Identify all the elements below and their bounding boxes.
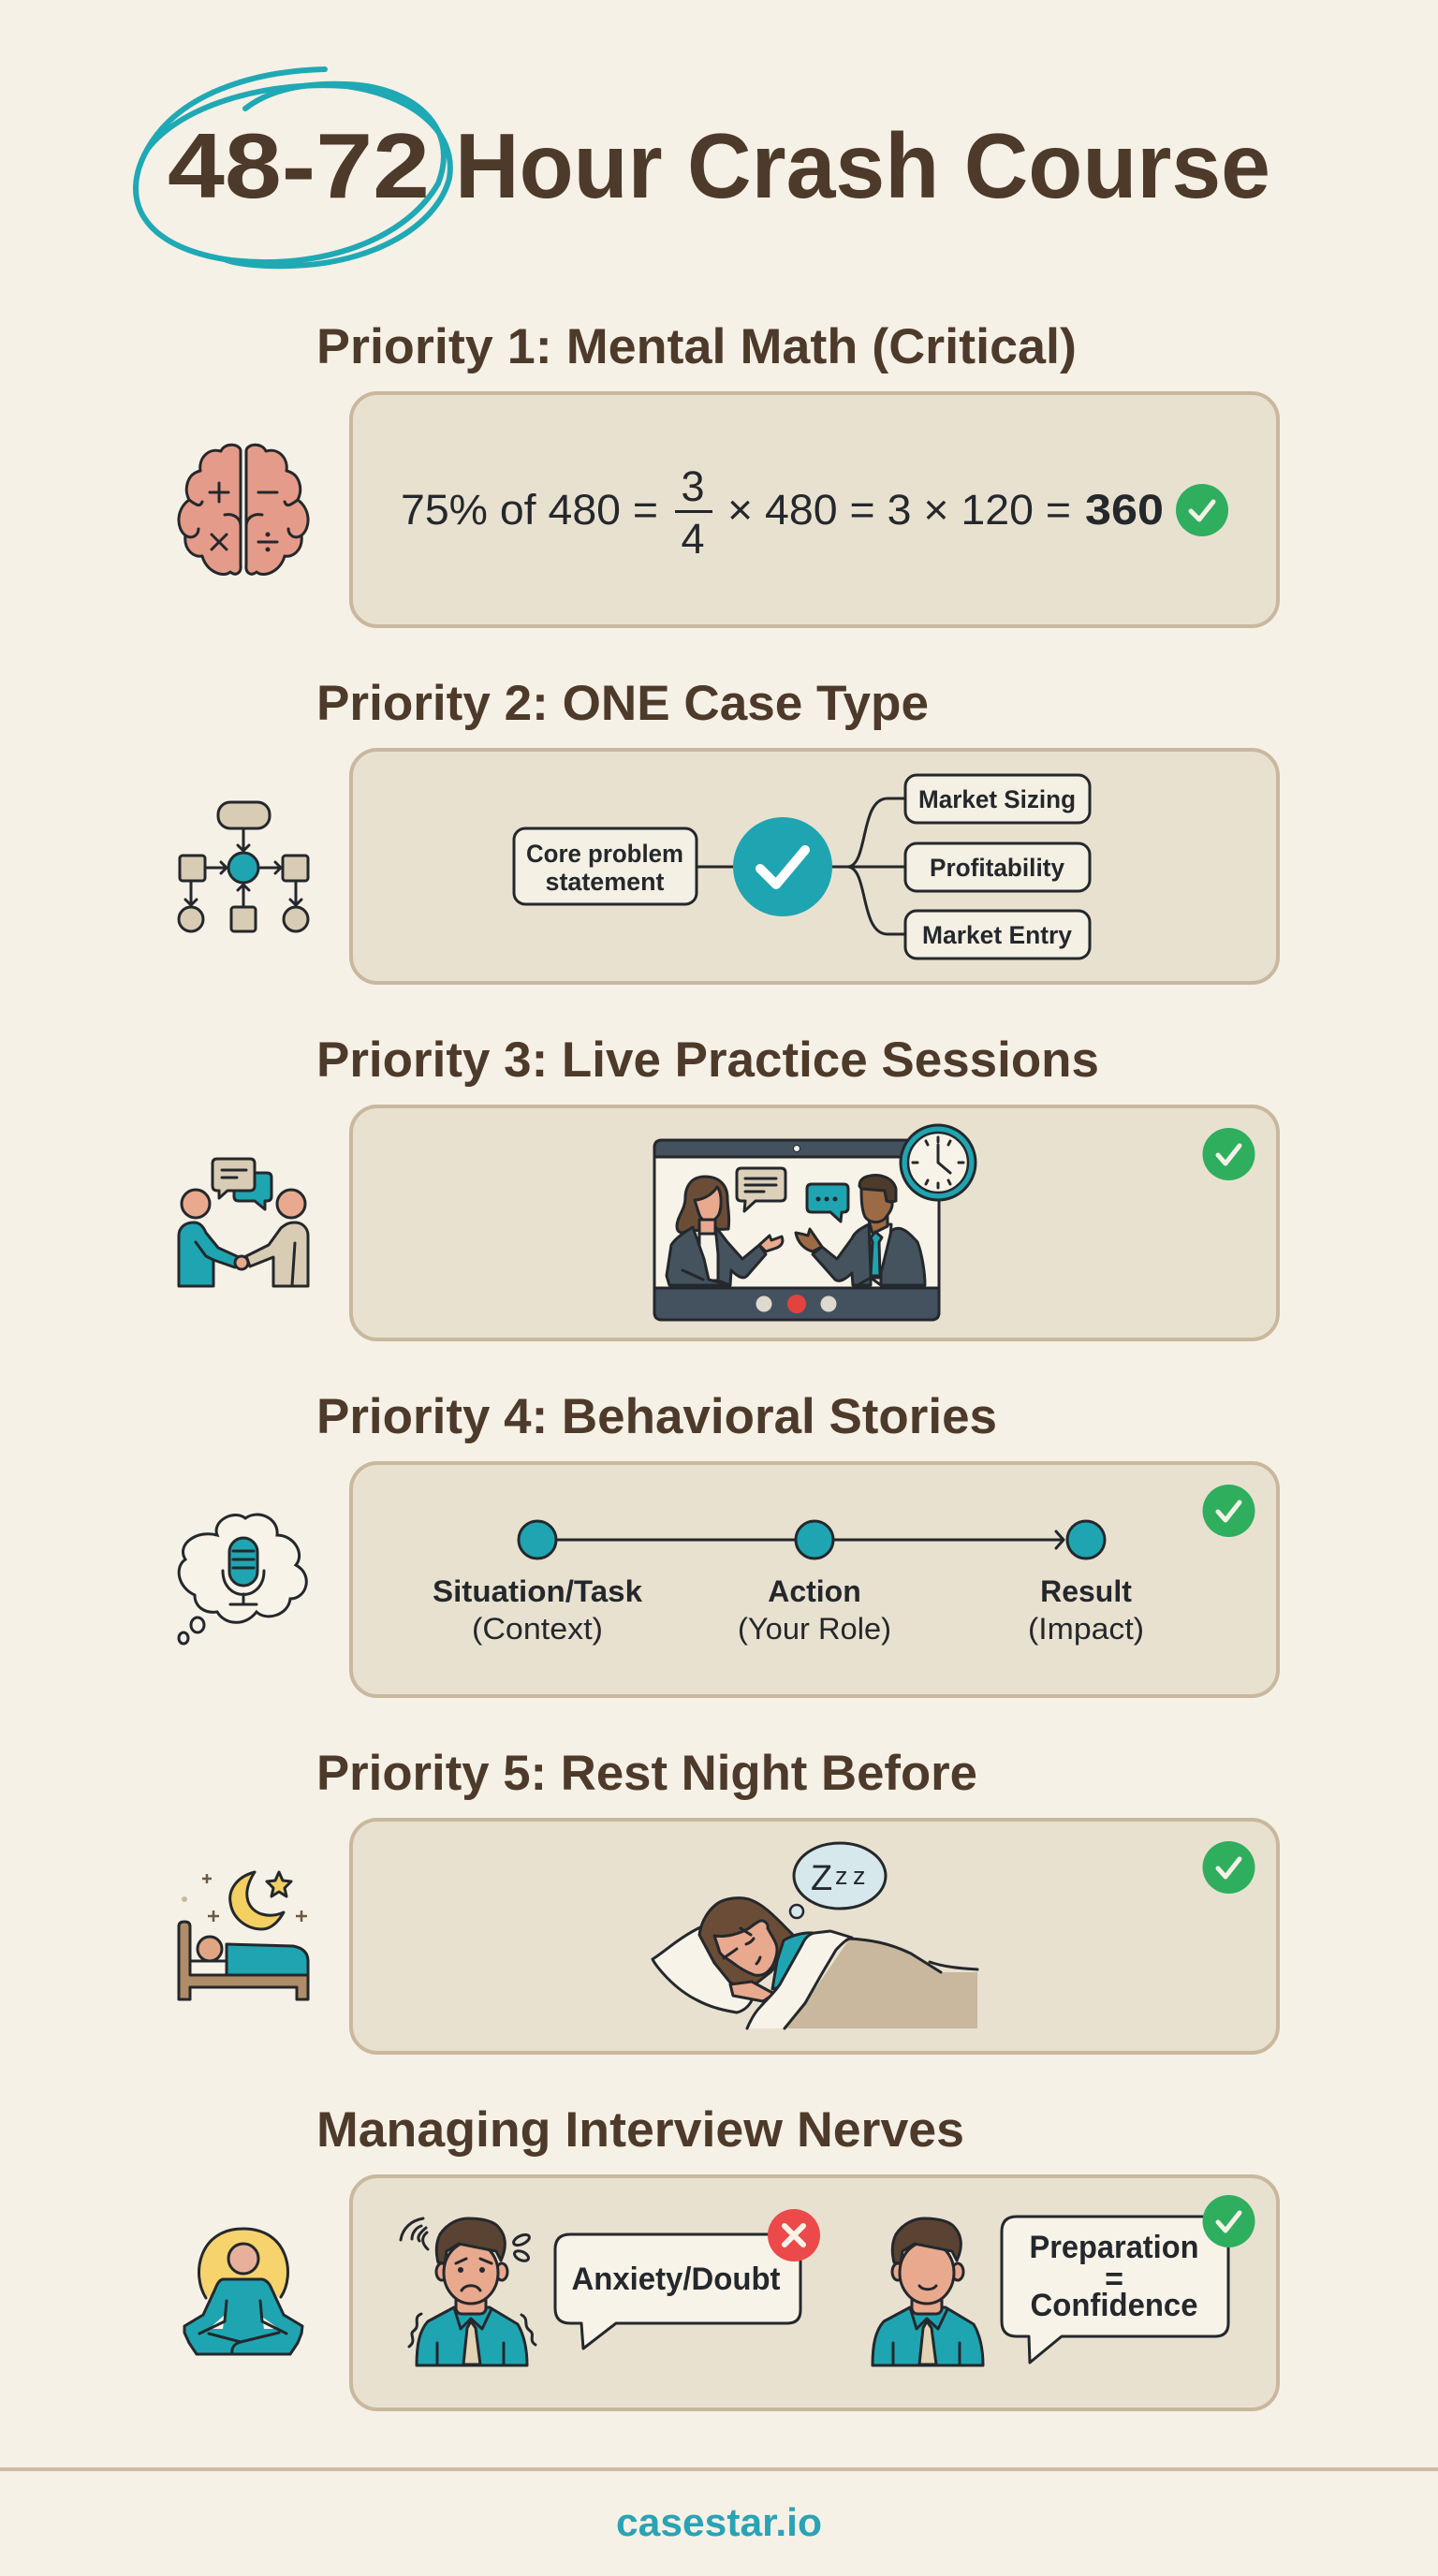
option: market sizing [905, 775, 1090, 823]
title remainder: Hour Crash Course [455, 114, 1270, 217]
man [796, 1176, 925, 1285]
footer [0, 2467, 1438, 2544]
top bar [654, 1140, 939, 1157]
option: profitability [905, 843, 1090, 891]
control bar [654, 1288, 939, 1320]
equation result: 360 [1085, 486, 1164, 534]
confident person [873, 2218, 983, 2365]
equation steps: × 480 = 3 × 120 = [727, 486, 1071, 534]
step: action: Action [768, 1574, 861, 1608]
step: result [1028, 1574, 1144, 1646]
icon: bed with moon [179, 1872, 308, 1999]
core problem box: statement [545, 868, 665, 896]
check badge [1202, 1841, 1255, 1894]
thought bubble Zzz: Z [811, 1859, 832, 1898]
card [351, 750, 1278, 983]
section: priority 2 one case type [179, 676, 1278, 983]
speech bubble: anxiety [555, 2234, 800, 2349]
step: situation: (Context) [472, 1612, 603, 1646]
card [351, 2176, 1278, 2409]
teal shirt [772, 1933, 813, 1989]
section: priority 4 behavioral stories [179, 1389, 1278, 1696]
heading: Priority 2: ONE Case Type [316, 676, 929, 731]
step: result: (Impact) [1028, 1612, 1144, 1646]
core problem box: Core problem [526, 840, 683, 868]
section: priority 1 mental math [179, 319, 1278, 626]
card [351, 1820, 1278, 2053]
heading: Priority 3: Live Practice Sessions [316, 1032, 1099, 1088]
anxious person [401, 2218, 536, 2365]
fraction three quarters [675, 462, 712, 563]
card [351, 393, 1278, 626]
hand [730, 1982, 774, 2001]
check badge [1202, 1485, 1255, 1537]
fraction three quarters: 3 [681, 462, 705, 510]
face [714, 1921, 777, 1975]
thought bubble Zzz: z [853, 1862, 865, 1890]
timeline node 3 [1067, 1521, 1105, 1559]
title [136, 69, 1270, 266]
teal check circle [733, 817, 832, 916]
step: action: (Your Role) [738, 1612, 891, 1646]
hand-drawn teal ring [136, 69, 450, 266]
speech bubble: preparation equals confidence: = [1105, 2261, 1123, 2297]
icon: brain [179, 445, 308, 575]
hair [699, 1898, 793, 1989]
section: managing interview nerves [184, 2102, 1278, 2409]
check badge [1176, 484, 1228, 536]
step: situation: Situation/Task [433, 1574, 642, 1608]
connector lines [697, 798, 905, 934]
beige speech bubble [737, 1168, 785, 1211]
head [456, 2291, 486, 2314]
option: profitability: Profitability [930, 854, 1064, 882]
white blanket fold [747, 1931, 852, 2028]
wall clock [901, 1125, 976, 1200]
step: action [738, 1574, 891, 1646]
timeline [519, 1521, 1105, 1559]
icon: meditating person [184, 2229, 302, 2354]
heading: Priority 5: Rest Night Before [316, 1746, 977, 1801]
body [417, 2307, 527, 2365]
check badge [1202, 1128, 1255, 1180]
step: situation [433, 1574, 642, 1646]
timeline node 1 [519, 1521, 556, 1559]
option: market entry [905, 911, 1090, 959]
title highlighted range: 48-72 [168, 114, 430, 217]
video call window [654, 1125, 976, 1320]
timeline node 2 [796, 1521, 833, 1559]
equation [401, 462, 1228, 563]
section: priority 5 rest [179, 1746, 1278, 2053]
head [912, 2291, 942, 2314]
heading: Priority 4: Behavioral Stories [316, 1389, 997, 1444]
body [873, 2307, 983, 2365]
speech bubble: preparation equals confidence: Confidence [1030, 2288, 1198, 2323]
icon: handshake with speech bubbles [179, 1159, 308, 1286]
speech bubble: anxiety: Anxiety/Doubt [571, 2261, 781, 2297]
step: result: Result [1040, 1574, 1132, 1608]
woman [667, 1177, 783, 1285]
heading: Priority 1: Mental Math (Critical) [316, 319, 1077, 374]
stress marks [401, 2218, 536, 2347]
pillow [653, 1926, 752, 2012]
blanket [785, 1939, 977, 2028]
thought bubble Zzz: z [835, 1862, 848, 1890]
red x badge [768, 2209, 820, 2261]
card [351, 1106, 1278, 1339]
speech bubble: preparation equals confidence: Preparation [1030, 2230, 1198, 2265]
check badge [1202, 2195, 1255, 2247]
heading: Managing Interview Nerves [316, 2102, 964, 2158]
sleeping person [653, 1843, 977, 2028]
window frame [654, 1140, 939, 1320]
teal speech bubble [807, 1184, 848, 1222]
option: market sizing: Market Sizing [918, 785, 1076, 813]
option: market entry: Market Entry [922, 921, 1072, 949]
timeline line [556, 1531, 1064, 1548]
section: priority 3 live practice [179, 1032, 1278, 1339]
core problem box [514, 828, 697, 904]
thought bubble Zzz [790, 1843, 886, 1918]
icon: flow diagram [179, 802, 308, 931]
speech bubble: preparation equals confidence [1002, 2217, 1228, 2363]
equation left side: 75% of 480 = [401, 486, 658, 534]
footer brand: casestar.io [616, 2500, 822, 2544]
card [351, 1463, 1278, 1696]
fraction three quarters: 4 [681, 515, 705, 563]
icon: microphone thought cloud [179, 1515, 306, 1644]
